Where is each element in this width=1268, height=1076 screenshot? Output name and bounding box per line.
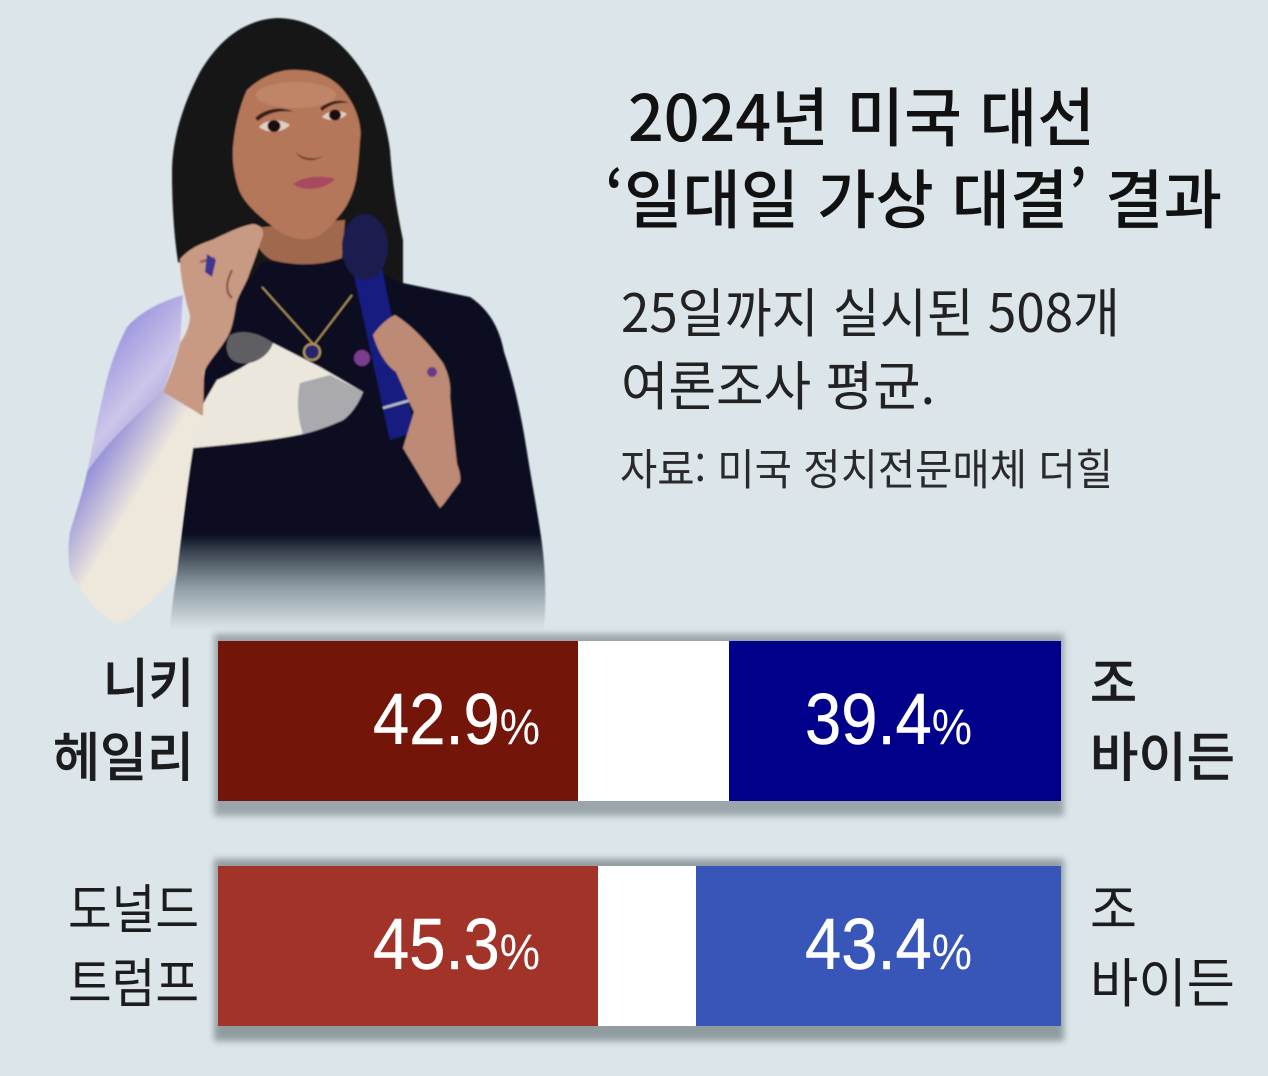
portrait ring on raised hand [205, 254, 216, 277]
label: Nikki Haley: 니키 [103, 642, 194, 718]
bar shadow [214, 634, 1064, 816]
title [605, 68, 1222, 242]
portrait left eyebrow [255, 109, 294, 121]
portrait lace collar [227, 332, 273, 363]
portrait microphone handle [353, 264, 415, 440]
portrait nose [296, 152, 325, 160]
portrait left eye [259, 120, 290, 132]
portrait: Nikki Haley holding a microphone [68, 18, 545, 630]
row 1: Haley vs Biden [53, 634, 1235, 816]
portrait chest shadow [298, 375, 363, 434]
portrait lips [293, 177, 335, 189]
portrait lower hand [373, 315, 460, 508]
portrait pendant [304, 344, 320, 360]
subtitle line 1: 25일까지 실시된 508개 [621, 272, 1120, 348]
label: Joe Biden [1090, 642, 1235, 792]
portrait right eye [322, 111, 347, 120]
source note: 자료: 미국 정치전문매체 더힐 [620, 436, 1113, 498]
row 2: Trump vs Biden [68, 859, 1235, 1041]
portrait chest highlight [193, 343, 363, 448]
bar: Biden share [729, 641, 1061, 801]
portrait sleeve upper, lilac [87, 295, 183, 490]
portrait hair [172, 18, 403, 300]
label: Joe Biden [1090, 868, 1235, 1018]
title line 2: ‘일대일 가상 대결’ 결과 [605, 150, 1222, 242]
subtitle line 2: 여론조사 평균. [621, 345, 935, 421]
portrait microphone band [383, 400, 411, 408]
portrait sweater body [170, 258, 545, 630]
portrait raised hand [163, 224, 263, 416]
label: Joe Biden: 바이든 [1090, 942, 1235, 1018]
subtitle [621, 272, 1120, 421]
value: 45.3%: 45.3% [373, 905, 540, 985]
label: Joe Biden: 조 [1090, 868, 1137, 944]
portrait finger creases [200, 258, 232, 298]
portrait face [233, 70, 361, 239]
value: 39.4%: 39.4% [805, 680, 972, 760]
portrait microphone head [342, 214, 388, 280]
value: 42.9%: 42.9% [373, 680, 540, 760]
bar: Biden share [696, 866, 1061, 1026]
label: Joe Biden: 조 [1090, 642, 1137, 718]
portrait brooch [354, 350, 370, 366]
portrait ring on lower hand [427, 367, 437, 377]
portrait sleeve lower, cream [68, 392, 203, 624]
portrait necklace [262, 287, 352, 345]
title line 1: 2024년 미국 대선 [628, 68, 1095, 160]
bar: Trump share [218, 866, 598, 1026]
label: Donald Trump: 도널드 [68, 868, 199, 944]
bar: Haley share [218, 641, 578, 801]
bar shadow [214, 859, 1064, 1041]
portrait right eyebrow [320, 101, 349, 111]
label: Nikki Haley [53, 642, 194, 792]
label: Joe Biden: 바이든 [1090, 716, 1235, 792]
value: 43.4%: 43.4% [805, 905, 972, 985]
label: Nikki Haley: 헤일리 [53, 716, 194, 792]
bar: undecided [578, 641, 729, 801]
bar: undecided [598, 866, 696, 1026]
label: Donald Trump: 트럼프 [68, 942, 199, 1018]
portrait neck [252, 220, 345, 264]
portrait forehead highlight [256, 82, 336, 108]
label: Donald Trump [68, 868, 199, 1018]
